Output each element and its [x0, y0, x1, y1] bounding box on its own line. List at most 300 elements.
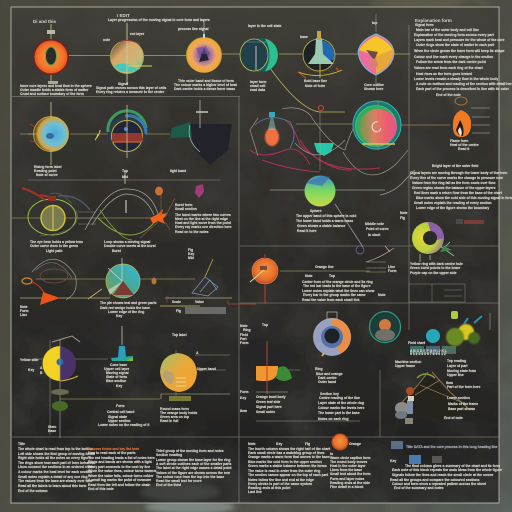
table: lower grid tags: A B C D E F G H I J K L — [410, 349, 447, 353]
text block: cone caption: Moving signal — [106, 371, 129, 375]
text block: bottom column four: Every stroke is part of the same system — [248, 482, 312, 486]
text block: bottom column four: Blue marks the cold form in the upper section — [248, 460, 322, 464]
text block: burst caption: Burst form — [175, 203, 192, 207]
text block: burst caption: Heat and light move from the point — [175, 221, 232, 225]
text block: mid right caption: Form — [388, 269, 396, 273]
icon: blue cone circle — [298, 31, 342, 78]
text block: loop caption: Reading point — [34, 169, 57, 173]
text block: right upper column: Values from the ring fall as the form cools over time — [412, 181, 496, 185]
text block: left mid labels: Stem — [48, 425, 56, 429]
text block: orange circle caption: Note — [305, 274, 313, 278]
text block: machinery right column — [395, 359, 480, 420]
text block: bottom column six: Read all the groups and compare the coloured sections — [390, 478, 480, 482]
text block: machinery right column: Layer of part — [447, 364, 468, 368]
icon: bottom orange circle — [332, 434, 348, 450]
text block: sphere caption: The upper band of this sphere is cold — [296, 214, 356, 218]
text block: bottom column four: Orange marks a warm form that moves to the base — [248, 455, 330, 459]
text block: centre column: Lower notes explain what the lines can show — [302, 289, 375, 293]
text block: blob caption: Green area on top — [160, 415, 189, 419]
text block: eye caption: Double curve meets at the burst — [104, 244, 156, 248]
text block: right upper column: Note — [400, 211, 408, 215]
text block: caption five: Core outline — [364, 83, 384, 87]
connector lines — [12, 54, 450, 435]
icon: orange flame — [453, 97, 490, 137]
text block: mid right caption: Line — [388, 265, 395, 269]
text block: machinery right column: Base part shown — [448, 407, 475, 411]
text block: bottom column six: Key — [390, 459, 396, 463]
text block: cone caption: Upper cell layer — [104, 367, 130, 371]
text block: right upper column: Lower edge of the figure shows the boundary — [416, 206, 489, 210]
text block: machinery right column: Upper frame — [395, 364, 415, 368]
text block: machinery right column: Moving state form — [447, 369, 476, 373]
text block: bottom column two: When the value falls, colour turns colder — [88, 474, 154, 478]
text block: bottom column four: Last line — [248, 490, 262, 494]
text block: mid right caption — [365, 222, 396, 273]
text block: explanation column: Heat rises as the form goes inward — [416, 72, 472, 76]
icon: small orange and pink markers — [155, 184, 204, 198]
text block: bottom column four: The value is read in order from the outer ring — [248, 469, 320, 473]
table strip: colored cells — [410, 346, 456, 354]
text block: mid right caption: Point of curve — [366, 227, 389, 231]
text block: bottom column one: The whole chart is read from top to the bottom — [18, 447, 93, 451]
text block: bottom column five: Lines from the base — [330, 468, 362, 472]
text block: bottom column three: Third group of the moving form and notes — [156, 449, 224, 453]
text block: pie caption: Dark red wedge holds the base — [100, 306, 150, 310]
diagram: purple tag and small curves — [356, 246, 394, 272]
text block: caption three: Thin outer band and tissue of form — [178, 79, 234, 83]
text block: caption five — [250, 80, 384, 92]
text block: ring caption — [410, 262, 463, 275]
text block: caption five: Shown here — [364, 87, 383, 91]
text block: burst caption: Fig — [188, 248, 193, 252]
text block: eye caption: Outer curve rises in the green — [30, 244, 78, 248]
text block: arc caption — [20, 305, 28, 317]
text block: bottom column three: Lower group shows the base layer for the ring — [156, 458, 230, 462]
text block: middle caption: Lower notes on the reading of it — [98, 423, 150, 427]
text block: right upper column: Fig — [400, 216, 405, 220]
text block: arc caption: Line — [20, 313, 27, 317]
text block: burst caption — [175, 203, 232, 260]
icon: teal pie circle — [106, 258, 140, 298]
text block: centre column — [302, 274, 386, 302]
text block: eye caption: Loop shows a moving signal — [104, 240, 150, 244]
text block: centre column: Every bar in the group marks the same — [303, 293, 366, 297]
text block: middle caption: Upper section — [108, 419, 131, 423]
text block: loop caption — [34, 165, 186, 179]
text block: bottom column one — [18, 442, 95, 493]
text block: explanation column: Layers mark heat and pressure for the whole of the core — [414, 38, 505, 42]
heading: top title: Di and this — [33, 19, 56, 24]
icon: green gradient sphere — [304, 176, 336, 206]
icon: yellow green splatter — [446, 311, 490, 346]
text block: bottom column two: Read from the left and follow the chain — [88, 483, 150, 487]
text block: right upper column: Green region shows the balance of the upper layers — [412, 186, 496, 190]
text block: orange circle caption: Orange line — [315, 265, 334, 269]
text block: loop caption: Note of curve — [36, 173, 58, 177]
text block: blob caption: The orange body holds — [160, 411, 197, 415]
collage: dark triangular machinery — [395, 372, 470, 424]
text block: bottom column two: End of this note — [88, 487, 114, 491]
text block: explanation column: Signal form — [415, 23, 434, 27]
text block: ring caption centre: Dark centre — [318, 376, 337, 380]
text block: bottom column five: Orange — [349, 442, 361, 446]
text block: bottom column six: Colour and form show a repeated pattern across the sheet — [392, 482, 487, 486]
highlighted yellow label — [161, 394, 230, 401]
text block: bottom column six — [390, 441, 502, 490]
text block: upper right mid notes: Field — [240, 333, 248, 337]
text block: orange circle caption — [305, 265, 334, 278]
text block: loop caption: Rising form label — [34, 165, 62, 169]
text block: bottom column five: Heat in the outer layer — [330, 464, 366, 468]
text block: upper right mid notes: Top — [262, 323, 268, 327]
icon: orange bowl and green leaf — [256, 341, 292, 394]
text block: bottom column one: Title — [18, 442, 25, 446]
text block: sphere caption: The lower band holds a warm mass — [296, 219, 353, 223]
text block: left mid labels: Key — [28, 368, 34, 372]
text block: upper right mid notes: Part — [240, 337, 247, 341]
text block: loop caption: Top — [122, 169, 128, 173]
text block: explanation column: Colour and line mark every change in the section — [414, 55, 493, 59]
text block: bowl caption — [256, 395, 286, 414]
text block: sphere caption: Read it here — [297, 229, 317, 233]
text block: ring caption centre: The lower part is the base — [318, 411, 360, 415]
text block: bottom column four — [248, 442, 331, 494]
text block: bottom column one: The values from the base are steady over time — [18, 479, 93, 483]
text block: caption five: layer form — [250, 80, 266, 84]
text block: bottom column six: Signals follow the lines and reach the small circle at the corner — [392, 473, 494, 477]
text block: upper right mid notes: Ring — [243, 328, 251, 332]
text block: upper right mid notes: Form — [240, 341, 248, 345]
text block: caption one — [20, 81, 92, 96]
icon: orange and violet circle — [186, 20, 222, 72]
swatch: red legend — [456, 219, 484, 224]
text block: bottom column five: Form and layer notes — [330, 477, 364, 481]
text block: mid right caption: In short — [368, 233, 381, 237]
text block: bottom column four: Note — [248, 442, 256, 446]
text block: top labels: process line signal — [178, 27, 209, 31]
text block: explanation column: End of the note — [436, 93, 461, 97]
table: small outlined grid — [409, 284, 465, 302]
icon: green concentric circle — [240, 38, 278, 72]
text block: caption one: Inner core layers and heat flow in the sphere — [20, 84, 92, 88]
icon: large green and pink circle — [353, 101, 401, 150]
icon: teal bowl — [295, 106, 345, 170]
text block: bottom column six: Each note of this block repeats the main ideas from the whole figure — [392, 468, 502, 472]
icon: rainbow arc circle — [95, 105, 146, 158]
text block: right upper column: Red lines mark a return flow from the base of the chart — [414, 191, 503, 195]
text block: ring caption centre — [315, 367, 364, 421]
text block: centre column: Center form of the orange circle and its ring — [302, 280, 373, 284]
text block: centre column: Note — [378, 293, 386, 297]
text block: machinery right column: Part of the form here — [447, 385, 480, 389]
text block: bottom column four: Green marks a stable balance between the forms — [248, 464, 327, 468]
text block: upper right mid notes: Form — [240, 390, 248, 394]
diagram: arc and orange wedge — [20, 259, 110, 305]
icon: blue and gold circle — [28, 102, 68, 165]
heading: top title: Explanation form — [415, 18, 452, 23]
text block: cone caption: Blue section — [106, 379, 126, 383]
text block: explanation column: When the circle grows the inner form will keep its shape — [414, 49, 505, 53]
text block: eye caption — [30, 240, 156, 253]
heading: top title — [33, 13, 452, 24]
text block: left mid labels: A — [40, 366, 43, 370]
text block: cone caption: Key — [116, 384, 122, 388]
text block: bottom column four: The section names appear on the top of each part — [248, 473, 329, 477]
text block: bottom column three: A soft stroke outlines each of the smaller parts — [156, 462, 232, 466]
text block: rule caption: Value — [195, 300, 204, 304]
text block: explanation column: A note on method and reading of the section with detail here — [416, 82, 512, 86]
text block: blob caption: Round mass form — [160, 407, 189, 411]
text block: centre column: Read the value from each small tick — [302, 298, 360, 302]
text block: bottom column three: The label at the right edge names a detail point — [156, 466, 232, 470]
text block: top labels: top — [372, 21, 377, 25]
text block: bottom column four: Fig — [305, 442, 310, 446]
text block: caption five: small cell — [250, 84, 265, 88]
text block: bottom column five: The round body moves — [330, 460, 367, 464]
text block: top labels: layer in the cell state — [248, 24, 281, 28]
text block: machinery right column: Upper line — [447, 373, 464, 377]
text block: loop caption: light band — [170, 169, 186, 173]
icon: orange core circle — [33, 24, 69, 82]
text block: middle caption: Signal state — [108, 415, 127, 419]
text block: bottom column four: Reading ends at this point — [248, 486, 291, 490]
text block: caption four — [304, 79, 327, 88]
diagram: blue sketch and rule — [165, 259, 256, 314]
text block: caption four: Note of form — [305, 84, 325, 88]
text block: pie caption: The pie shows teal and green parts — [100, 301, 157, 305]
text block: middle caption: Form — [116, 404, 124, 408]
text block: top labels: Layer progression of the moving signal in core form and layers — [108, 18, 210, 22]
icon: rounded pie in yellow and pink — [358, 14, 394, 84]
text block: caption one: Crust and surface boundary of the form — [20, 92, 84, 96]
text block: machinery right column: Top reading — [447, 359, 466, 363]
text block: left mid labels: B — [40, 371, 43, 375]
text block: bottom column two: A small tag marks the point of measure — [88, 478, 151, 482]
text block: bottom column six: End of the summary and notes — [394, 486, 444, 490]
text block: ring caption centre: Centre reading of the line — [319, 396, 360, 400]
text block: mid right caption: Middle note — [365, 222, 384, 226]
text block: rule caption — [172, 300, 204, 337]
text block: bowl caption: Signal part here — [256, 405, 282, 409]
text block: burst caption: Small section — [175, 207, 197, 211]
text block: upper right mid notes: Note — [240, 324, 248, 328]
text block: machinery right column: Item — [446, 381, 453, 385]
text block: flame caption: Flame form — [450, 139, 468, 143]
text block: right upper column: Signal layers are moving through the lower body of the form — [410, 171, 507, 175]
text block: bottom column six: The final column gives a summary of the chart and its form — [405, 464, 500, 468]
text block: ring caption centre: Blue and orange — [316, 372, 343, 376]
text block: ring caption: Yellow ring with dark centre hole — [410, 262, 463, 266]
text block: bottom column three: Section heading — [156, 453, 182, 457]
text block: top labels — [47, 18, 377, 42]
text block: cone caption: State of form — [106, 375, 127, 379]
text block: blob caption: Upper band — [197, 367, 216, 371]
text block: explanation column: Values are read from each ring of the chart — [414, 66, 484, 70]
text block: explanation column: Lower levels remain a steady flow in the whole body — [414, 77, 498, 81]
text block: burst caption: Mid — [188, 256, 194, 260]
text block: explanation column: Outer rings show the state of matter in each part — [416, 43, 495, 47]
text block: bottom column one: Small notes explain a detail of any one ring — [18, 475, 88, 479]
text block: bottom column four: Each small circle has a matching group of lines — [248, 451, 325, 455]
icon: yellow ring with dark hole — [412, 222, 454, 262]
text block: caption one: Outer mantle holds a stable form of matter — [20, 88, 89, 92]
icon: orange burst — [140, 190, 175, 238]
text block: left mid labels: Base — [48, 429, 56, 433]
text block: bottom column one: A colour marks the heat level for each section — [18, 470, 92, 474]
text block: bottom column five: Warm circle caption form — [330, 456, 371, 460]
text block: bottom column three: Values of the figure are shown across the row — [156, 471, 230, 475]
text block: sphere caption — [296, 209, 356, 233]
text block: bottom column one: End of the column — [18, 489, 48, 493]
text block: machinery right column: End of note — [444, 416, 463, 420]
text block: caption three — [174, 79, 238, 91]
text block: machinery right column: Marks of the frame — [448, 402, 478, 406]
text block: ring caption centre: Outer band — [318, 380, 336, 384]
text block: machinery right column: Lower section — [447, 396, 470, 400]
text block: upper right mid notes: Item — [240, 409, 247, 413]
text block: flame caption: Heat of the centre — [450, 143, 479, 147]
text block: bottom column one: Lines connect the sections in an ordered chain — [18, 465, 94, 469]
text block: left mid labels — [20, 358, 56, 433]
text block: rule caption: Top label — [172, 333, 187, 337]
icon: red and blue network — [250, 112, 380, 172]
text block: bottom column four: The fourth column shows the right half of the chart — [248, 447, 331, 451]
text block: pie caption — [100, 301, 157, 318]
text block: left mid labels: Yellow side — [20, 358, 38, 362]
diagram: eye and double loop — [22, 171, 158, 240]
text block: bottom column one: Read all the labels to learn about this form — [18, 484, 86, 488]
text block: bowl caption: Orange bowl body — [256, 395, 286, 399]
text block: bottom column four: Notes follow the line and end at the edge — [248, 478, 314, 482]
text block: bottom column two: Rings and bands are shown with a light — [88, 460, 153, 464]
text block: rule caption: Fig — [176, 309, 181, 313]
text block: machinery right column: Machine section — [395, 360, 421, 364]
text block: caption two: Every ring returns a measure to the centre — [96, 90, 164, 94]
icon: teal ring with dark core — [370, 312, 400, 342]
text block: ring caption centre: Section key — [320, 392, 339, 396]
icon: half yellow half purple sphere — [42, 336, 80, 438]
text block: right upper column: Blue marks show the cold side of this moving signal in form — [416, 196, 512, 200]
text block: bottom column two: Every part connects to the next by line — [88, 465, 150, 469]
text block: cone caption: Cone base — [110, 363, 127, 367]
icon: cyan dot — [426, 329, 440, 343]
text block: ring caption: Purple cap on the upper side — [410, 271, 457, 275]
text block: bottom column five: Small text about the form — [330, 472, 371, 476]
text block: explanation column: Main bar of the outer body and cell line — [416, 28, 479, 32]
text block: bottom column two: How to read each of the parts — [88, 451, 136, 455]
icon: orange sun circle — [250, 254, 278, 304]
text block: centre column: The red bar leads to the base of the figure — [303, 284, 371, 288]
text block: burst caption: The burst marks where two curves — [175, 213, 231, 217]
text block: bottom column three — [156, 449, 232, 487]
text block: eye caption: The eye form holds a yellow lens — [30, 240, 83, 244]
text block: sphere caption: Sphere — [310, 209, 322, 213]
text block: centre column: Top — [329, 274, 335, 278]
text block: explanation column — [414, 23, 512, 97]
text block: blob caption: A — [196, 351, 199, 355]
text block: bottom column one: Right side holds all the notes on every figure — [18, 456, 90, 460]
text block: bowl caption: Green leaf side — [256, 400, 280, 404]
text block: upper right mid notes — [240, 323, 268, 413]
text block: caption four: Bold base line — [304, 79, 327, 83]
text block: caption two: Signal — [118, 82, 128, 86]
text block: bottom column five: Reading ends at the side — [330, 481, 370, 485]
text block: cone caption — [104, 363, 130, 388]
text block: eye caption: Light path — [46, 249, 62, 253]
icon: dark heart diagram — [170, 100, 232, 165]
icon: orange and green blob sphere — [160, 353, 197, 392]
text block: ring caption centre: Notes on each ring — [318, 417, 349, 421]
text block: right upper column: Every line of the curve marks the change in pressure now — [410, 176, 503, 180]
text block: flame caption: Bright layer of the outer field — [432, 164, 478, 168]
text block: bottom column three: The colour runs from the top into the base — [156, 475, 224, 479]
text block: bottom column two: The red heading leads a list of notes here — [88, 456, 155, 460]
table: lower grid tags: Field chart — [408, 341, 426, 345]
text block: explanation column: Each part of the process is described in line with its color — [416, 87, 510, 91]
text block: bottom column two: Process forms and key list here — [88, 447, 139, 451]
text block: top labels: base — [300, 35, 308, 39]
text block: bottom column two — [88, 447, 157, 491]
text block: bottom column three: End of the third — [156, 483, 181, 487]
text block: caption two: Signal path moves across this layer of cells — [96, 86, 166, 90]
text block: bottom column five — [330, 442, 371, 489]
text block: sphere caption: Green shows a stable balance — [297, 224, 346, 228]
text block: loop caption: Mid — [122, 175, 128, 179]
text block: bottom column five: In — [330, 452, 333, 456]
text block: blob caption: Read in full — [160, 419, 178, 423]
text block: burst caption: Every ray marks one direction here — [175, 225, 232, 229]
text block: top labels: note — [103, 38, 110, 42]
icon: tan and teal circle — [110, 23, 152, 84]
text block: top labels: red layer — [130, 32, 145, 36]
text block: pie caption: Lower edge of the ring — [108, 310, 144, 314]
text block: burst caption: Read on to the notes — [175, 230, 209, 234]
text block: flame caption — [432, 139, 479, 168]
text block: caption three: The colour marks a higher level of heat — [174, 83, 238, 87]
text block: bottom column six: Title DATA and the core process in this long heading line — [406, 445, 498, 449]
text block: blob caption — [160, 351, 216, 423]
text block: pie caption: Key — [116, 314, 122, 318]
text block: bottom column two: When the value rises, colour turns warmer — [88, 469, 157, 473]
text block: flame caption: Read it — [458, 147, 470, 151]
text block: middle caption: Central cell band — [107, 410, 134, 414]
icon: blue and orange ring — [313, 312, 351, 356]
text block: right upper column: Small notes explain the reading of every section — [414, 201, 492, 205]
text block: bottom column one: The rings show how each part of form behaves — [18, 461, 94, 465]
text block: bottom column four: Key — [276, 442, 282, 446]
text block: middle caption — [98, 404, 150, 427]
text block: right upper column — [400, 171, 512, 220]
table: lower grid tags — [408, 341, 447, 356]
text block: bottom column three: Read the small text for more — [156, 479, 202, 483]
text block: bowl caption: Small notes — [256, 410, 275, 414]
text block: burst caption: Key — [188, 252, 194, 256]
heading: top title: I EDIT — [117, 13, 130, 18]
text block: burst caption: Meet on the line at the right edge — [175, 217, 228, 221]
icon: teal cone — [111, 326, 133, 361]
text block: arc caption: Note — [20, 305, 28, 309]
text block: bottom column five: Fine detail in a block — [330, 485, 363, 489]
text block: eye caption: Burst — [112, 249, 122, 253]
text block: caption two — [96, 82, 166, 94]
text block: bottom column one: Left side shows the first group of moving forms — [18, 452, 95, 456]
table: lower grid tags: 0 1 2 3 4 5 6 7 8 9 0 1 2 — [410, 352, 446, 356]
text block: rule caption: Scale — [172, 300, 181, 304]
text block: ring caption centre: Colour marks the levels here — [318, 406, 364, 410]
text block: caption five: read data — [250, 88, 265, 92]
text block: arc caption: Form — [20, 309, 28, 313]
text block: ring caption centre: Layer state of the whole ring — [318, 401, 364, 405]
